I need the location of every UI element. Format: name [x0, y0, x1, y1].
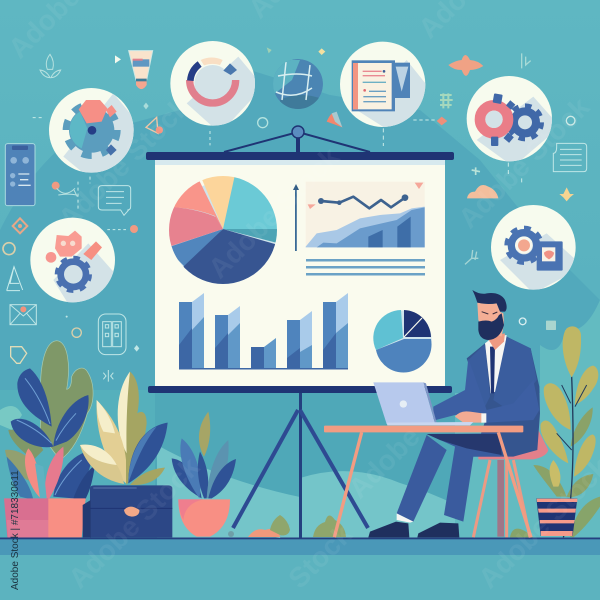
- circle: ring chart: [170, 41, 255, 126]
- man: sleeve: [433, 358, 539, 423]
- circle: two gears: [466, 76, 552, 162]
- watermarks: Stock: [282, 518, 358, 594]
- icon: phone: [5, 144, 35, 206]
- circle: gear: [49, 88, 134, 173]
- plant: right olive: [510, 326, 600, 537]
- man: thigh and front leg: [427, 433, 500, 522]
- left plants and icons group: [4, 305, 236, 537]
- area and line chart: [306, 182, 425, 247]
- laptop: [373, 382, 473, 425]
- suitcase: [83, 485, 172, 537]
- pot: striped: [536, 498, 577, 536]
- plant: cream olive: [80, 372, 168, 485]
- projector stand top: hanger: [224, 126, 370, 154]
- icon: small symbols: [11, 316, 139, 382]
- projection screen: [146, 152, 454, 387]
- icon: decorations: [318, 48, 575, 264]
- icon: device: [98, 314, 126, 355]
- plant: back olive: [5, 341, 93, 482]
- circle: gear and box: [491, 205, 576, 290]
- man: shoes: [368, 522, 459, 537]
- circle: robot and gear: [30, 218, 115, 302]
- plant: small potted: [172, 412, 236, 537]
- text lines: [306, 259, 425, 276]
- icon: speech bubble: [98, 186, 131, 215]
- watermarks: Adobe Stock: [202, 141, 346, 284]
- man: hand: [455, 411, 483, 423]
- pot: pink: [4, 498, 86, 537]
- circle: document: [340, 42, 426, 127]
- desk, chair, man group: [324, 290, 600, 537]
- small pie chart: [373, 310, 432, 373]
- man: back leg: [397, 435, 447, 522]
- arrow axis: [293, 184, 299, 251]
- small bushes on floor: [248, 515, 346, 537]
- icon: decorations: [3, 47, 272, 291]
- globe: [273, 59, 325, 110]
- desk: [324, 426, 531, 537]
- plant: pink leaves: [7, 447, 64, 500]
- watermarks: Adobe: [342, 421, 426, 504]
- plant: dark blue leaves: [11, 368, 95, 500]
- man: jacket: [467, 337, 540, 457]
- icons: ring and save: [519, 318, 556, 330]
- watermarks: Adobe Stock: [52, 91, 196, 234]
- pie chart: [169, 176, 277, 284]
- icon: list card: [553, 143, 587, 172]
- top-left icons and circles: [3, 41, 272, 307]
- Adobe stock id: Adobe Stock | #718330611: [10, 470, 21, 590]
- watermarks: Adobe Stock: [62, 451, 206, 594]
- icon: paint tube: [129, 51, 153, 89]
- top-right icons and circles: [318, 42, 587, 293]
- floor: [0, 538, 600, 600]
- man: shirt and tie: [485, 335, 507, 393]
- easel bottom bar and legs: [148, 386, 452, 538]
- man: jacket lapels: [468, 337, 537, 417]
- watermarks: Adobe Stock: [452, 91, 596, 234]
- bar chart: [179, 293, 348, 370]
- man: head: [472, 290, 507, 350]
- chair: [473, 420, 548, 537]
- icon: envelope: [10, 305, 36, 325]
- shin overlay: [397, 513, 413, 523]
